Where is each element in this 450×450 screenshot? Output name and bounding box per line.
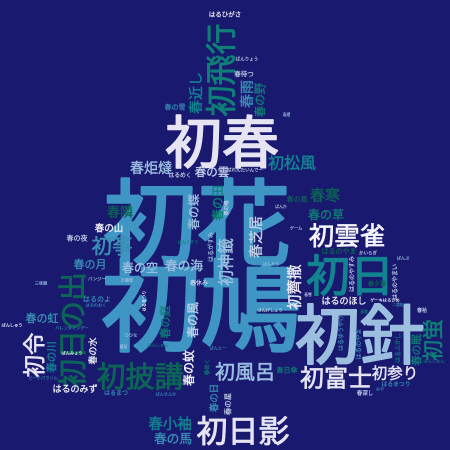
- word: 春の田: 春の田: [211, 185, 225, 221]
- word: 万愚節: 万愚節: [121, 276, 133, 284]
- word: はるひがさ: はるひがさ: [209, 10, 241, 18]
- word: ばんそう: ばんそう: [263, 260, 279, 268]
- word: ばんか: ばんか: [275, 204, 287, 209]
- word: 春深し: 春深し: [357, 389, 373, 397]
- word: 春夕暮: 春夕暮: [368, 280, 386, 288]
- word: 春の海: 春の海: [165, 259, 203, 273]
- word: はるのよ: はるのよ: [83, 296, 111, 304]
- word: 春待つ: 春待つ: [234, 69, 254, 78]
- word: 春の蚊: 春の蚊: [182, 350, 196, 386]
- word: ばんみょう: ばんみょう: [62, 350, 82, 356]
- word: 春芝居: 春芝居: [248, 216, 264, 258]
- word: 春日傘: 春日傘: [276, 366, 298, 374]
- word: 初薺撒: 初薺撒: [286, 264, 304, 310]
- word: 春の虹: 春の虹: [26, 312, 58, 325]
- word: 春の眠: 春の眠: [411, 334, 423, 366]
- word: 春の庭: 春の庭: [158, 306, 172, 338]
- word: はるふかし: はるふかし: [395, 333, 402, 363]
- word: 春近し: 春近し: [188, 72, 204, 114]
- word: はるのみず: はるのみず: [52, 384, 98, 394]
- word: はるのやま: はるのやま: [322, 248, 356, 256]
- word: 春雪: 春雪: [304, 292, 312, 297]
- word: 春寒: 春寒: [310, 188, 340, 204]
- word: 初神籤: 初神籤: [218, 238, 236, 286]
- word: 春の風: 春の風: [186, 302, 200, 338]
- word: 春めく: 春めく: [203, 359, 211, 375]
- word: 初春: 初春: [165, 112, 279, 176]
- word: 春の日: 春の日: [208, 384, 220, 412]
- word: ばんしゅう: ばんしゅう: [2, 322, 22, 328]
- word: はるまつり: はるまつり: [142, 291, 148, 311]
- word: ばんとー: ばんとー: [210, 344, 226, 352]
- word: はるまつ: はるまつ: [104, 390, 128, 397]
- word: 初針: 初針: [295, 300, 425, 372]
- word: バレンタインデー: バレンタインデー: [55, 324, 89, 332]
- word: 初参り: 初参り: [372, 364, 418, 382]
- word: ばんりょう: ばんりょう: [236, 56, 258, 62]
- word: はるめく: はるめく: [168, 172, 192, 179]
- word: 春炬燵: 春炬燵: [130, 160, 172, 176]
- word: 初富士: 初富士: [300, 366, 372, 392]
- word: ばんぐそう: ばんぐそう: [178, 238, 198, 246]
- word: 春の野: 春の野: [254, 82, 267, 117]
- word: みや: みや: [376, 386, 384, 392]
- word: ばんしゅん: ばんしゅん: [424, 358, 444, 364]
- word: はるのほし: はるのほし: [321, 296, 367, 306]
- word: 初蛍: 初蛍: [422, 319, 446, 361]
- word: 初飛行: 初飛行: [204, 24, 240, 116]
- word: 春の空: 春の空: [122, 261, 158, 275]
- word: はるのやまい: はるのやまい: [391, 264, 399, 300]
- word: 春の山: 春の山: [95, 222, 123, 234]
- word: 二重虹: 二重虹: [392, 302, 404, 307]
- word: 初風呂: 初風呂: [215, 361, 275, 384]
- word: 春の鴨: 春の鴨: [223, 200, 230, 216]
- word: 雛菊: 雛菊: [120, 344, 127, 349]
- word: 春の雪: 春の雪: [164, 102, 186, 112]
- word: 初雲雀: 初雲雀: [309, 223, 385, 251]
- word: はるがすみ: はるがすみ: [207, 232, 215, 262]
- word: 春の水: 春の水: [87, 337, 98, 365]
- word: 春の蝶: 春の蝶: [186, 194, 201, 230]
- word: 春の馬: 春の馬: [154, 432, 192, 446]
- word: かいらぎ: かいらぎ: [359, 250, 377, 256]
- word: 春雷: 春雷: [360, 309, 368, 314]
- word: 春休み: 春休み: [190, 279, 208, 287]
- word: 春燈: 春燈: [283, 112, 290, 117]
- word: 春雨: 春雨: [239, 80, 255, 108]
- word: 春の星: 春の星: [222, 392, 232, 415]
- word: 三味線: 三味線: [35, 280, 48, 286]
- word: ばんげしょう: ばんげしょう: [257, 306, 283, 314]
- word: 初日の出: 初日の出: [57, 272, 90, 388]
- word: ばれんたいんでー: ばれんたいんでー: [227, 166, 263, 174]
- word: 春の月: 春の月: [74, 258, 106, 271]
- word: 初鳩: 初鳩: [101, 253, 301, 365]
- word: ビーチパラソル: ビーチパラソル: [28, 374, 58, 382]
- word: 初花: 初花: [103, 172, 291, 278]
- word: 春の風邪: 春の風: [286, 194, 308, 204]
- word: 春の夜: 春の夜: [66, 234, 88, 242]
- word: はるゆうやけ: はるゆうやけ: [337, 315, 345, 351]
- word: はるのやま: はるのやま: [354, 328, 362, 360]
- word: 春袷: 春袷: [417, 307, 427, 314]
- word: ひひな: ひひな: [125, 332, 137, 338]
- word: はるのおく: はるのおく: [86, 302, 106, 308]
- word: はるまつり: はるまつり: [382, 381, 410, 388]
- word: 春の雲: 春の雲: [195, 166, 229, 179]
- word: 初披講: 初披講: [96, 361, 184, 394]
- word: ゲーム: ゲーム: [290, 224, 302, 232]
- word: ばんしゅん: ばんしゅん: [148, 342, 168, 348]
- word: 春小袖: 春小袖: [148, 416, 192, 433]
- word: 初日影: 初日影: [196, 414, 290, 450]
- word: バンジー: バンジー: [88, 276, 107, 282]
- word: ゲートはるさめ: ゲーキはるさめ: [370, 296, 400, 304]
- word: 初筝: 初筝: [92, 236, 132, 258]
- word: 春の草: 春の草: [308, 208, 344, 222]
- word: ばんぷ: ばんぷ: [397, 254, 409, 262]
- word: 春の川: 春の川: [46, 341, 58, 373]
- word: 初令: 初令: [22, 332, 48, 378]
- word: 初松風: 初松風: [268, 154, 316, 172]
- word: 初日: 初日: [306, 252, 394, 302]
- word: ばんせんか: ばんせんか: [156, 390, 177, 398]
- word: 春隣: 春隣: [107, 204, 133, 220]
- word: はるのやすみ: はるのやすみ: [348, 256, 356, 292]
